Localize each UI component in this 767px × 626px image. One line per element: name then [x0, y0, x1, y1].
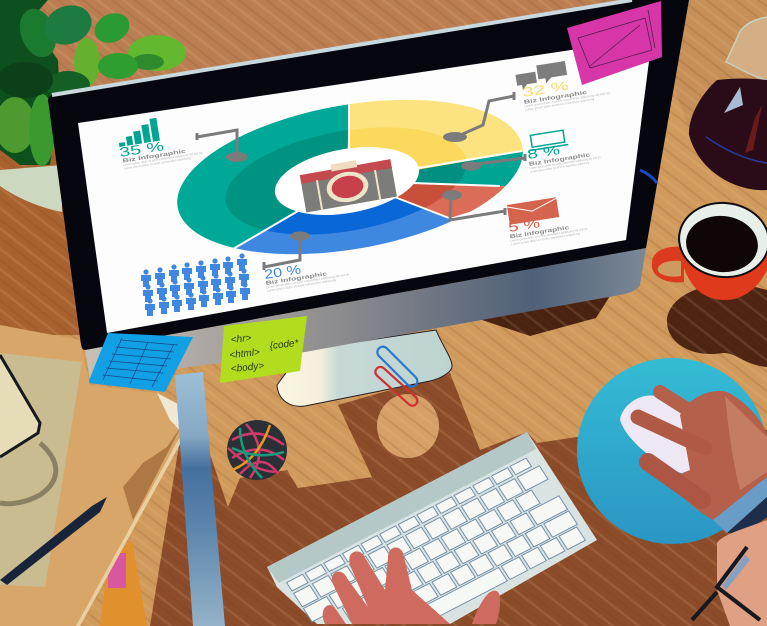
value: 8 %	[526, 142, 562, 162]
keys: number row	[294, 466, 548, 607]
glasses shadow	[0, 443, 56, 504]
yarn ball	[227, 420, 287, 480]
keys: space row	[419, 527, 585, 622]
caption: Biz Infographic	[265, 271, 327, 287]
monitor bezel	[48, 0, 689, 350]
envelope sheet	[0, 353, 82, 587]
body lines: Lorem ipsum dolor sit amet consectetur adipiscing elit sed do	[266, 272, 350, 289]
lower right hand	[717, 520, 767, 626]
segment dividers	[233, 100, 522, 249]
pink card under folder	[108, 553, 126, 588]
value: 20 %	[263, 261, 303, 282]
monitor chin	[85, 248, 646, 380]
label: 35 percent	[115, 112, 203, 171]
mouse	[620, 396, 705, 478]
blue note table	[103, 338, 178, 387]
icon: envelope	[507, 197, 559, 225]
pen	[0, 497, 107, 585]
keys: home row	[342, 496, 568, 622]
value: 32 %	[521, 78, 571, 100]
note handwriting: <body>	[230, 361, 265, 375]
segment: blue 20%	[236, 208, 450, 254]
body lines 2: Lorem ipsum dolor sit amet consectetur adipiscing	[530, 160, 590, 174]
callout dots	[226, 132, 481, 240]
body lines 2: Lorem ipsum dolor sit amet consectetur adipiscing	[124, 156, 192, 171]
icon: signal bars	[116, 118, 160, 147]
plant	[0, 0, 186, 166]
keys: function row	[287, 458, 532, 591]
carafe	[689, 17, 767, 190]
cup shadow	[667, 283, 767, 367]
segment: yellow 32%	[350, 100, 523, 162]
body lines: Lorem ipsum dolor sit amet consectetur adipiscing elit sed do	[510, 227, 588, 243]
label: 5 percent	[505, 193, 589, 246]
ruler	[175, 372, 225, 626]
centre hole	[270, 137, 424, 225]
label: 32 percent	[515, 55, 611, 112]
donut chart	[177, 92, 526, 270]
caption: Biz Infographic	[528, 152, 591, 168]
body lines: Lorem ipsum dolor sit amet consectetur adipiscing elit sed do	[123, 151, 203, 167]
keyboard top band	[267, 432, 536, 583]
note handwriting: {code*	[269, 338, 300, 352]
typing hand	[323, 548, 500, 624]
note handwriting	[227, 328, 302, 375]
light oval in shadow	[377, 394, 439, 458]
caption: Biz Infographic	[122, 149, 186, 165]
sticky note: pink	[567, 1, 662, 85]
callout leaders	[197, 92, 525, 270]
value: 5 %	[507, 215, 542, 235]
monitor top edge highlight	[52, 0, 632, 95]
coffee cup	[652, 197, 767, 300]
plant pot	[0, 165, 62, 212]
label: 8 percent	[524, 125, 602, 174]
icon: speech bubbles	[515, 61, 568, 91]
folder and papers	[0, 325, 195, 626]
value: 35 %	[118, 138, 166, 160]
monitor screen	[78, 38, 652, 333]
right hand and sleeve	[638, 391, 767, 533]
caption: Biz Infographic	[523, 90, 588, 106]
segment: teal 8%	[415, 151, 523, 186]
icon: laptop	[526, 130, 568, 151]
mouse pad	[577, 358, 767, 544]
pink note sketch	[578, 10, 655, 68]
monitor shadow on desk	[476, 296, 610, 336]
note handwriting: <hr>	[230, 333, 252, 346]
keys: lower row	[376, 511, 577, 624]
note handwriting: <html>	[229, 347, 261, 361]
glasses lens	[0, 358, 38, 455]
sticky note: blue	[88, 333, 193, 392]
segment: teal 35%	[177, 104, 348, 248]
icon: camera	[299, 154, 397, 212]
orange envelope under folder	[100, 540, 147, 626]
body lines 2: Lorem ipsum dolor sit amet consectetur adipiscing	[267, 278, 337, 293]
body lines: Lorem ipsum dolor sit amet consectetur adipiscing elit sed do	[529, 155, 601, 170]
glasses lower right	[692, 547, 760, 620]
inner darker ring	[226, 127, 466, 234]
paper clips	[373, 344, 420, 408]
shadow on wood	[150, 373, 767, 626]
caption: Biz Infographic	[509, 225, 570, 240]
keyboard	[267, 432, 597, 624]
monitor stand	[277, 330, 452, 406]
body lines: Lorem ipsum dolor sit amet consectetur adipiscing elit sed do	[524, 91, 610, 108]
glasses	[0, 355, 40, 457]
label: 20 percent	[263, 254, 350, 293]
keys: qwerty row	[303, 490, 540, 622]
icon: people grid	[141, 253, 250, 316]
sticky note: green with code	[220, 316, 307, 383]
segment: red 5%	[424, 186, 505, 218]
blue reflection on bezel	[640, 170, 657, 183]
body lines 2: Lorem ipsum dolor sit amet consectetur adipiscing	[525, 97, 595, 112]
body lines 2: Lorem ipsum dolor sit amet consectetur adipiscing	[511, 231, 581, 246]
